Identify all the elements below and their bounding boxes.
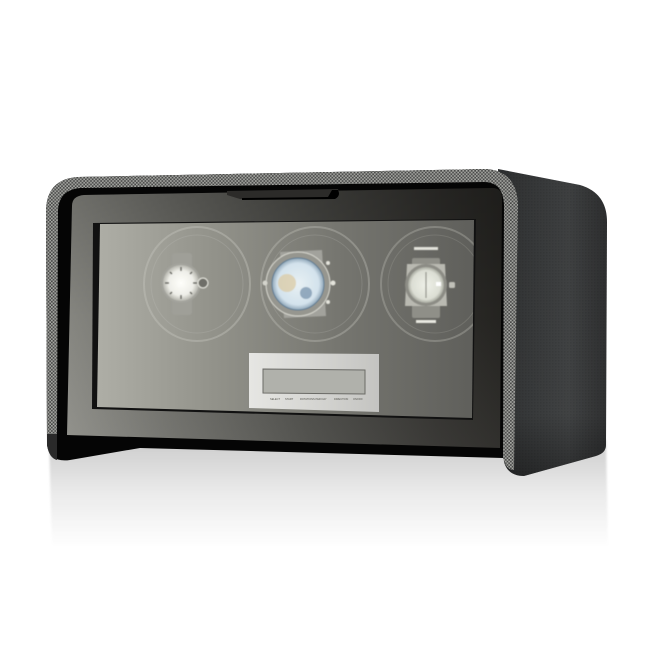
glass window xyxy=(97,220,474,418)
winder ring 2 xyxy=(261,227,369,341)
watch 1 xyxy=(161,253,208,315)
carbon fibre trim xyxy=(46,169,518,470)
winder rings clipped by the glass xyxy=(144,227,489,341)
watch 3 xyxy=(405,247,455,323)
LCD display xyxy=(263,369,365,394)
button labels: ROTATIONS PER DAY xyxy=(300,397,327,401)
box side panel xyxy=(498,169,607,476)
product illustration: three-watch winder box xyxy=(46,169,608,526)
box front shell xyxy=(46,169,518,462)
button labels: ON/OFF xyxy=(353,397,363,401)
floor reflection xyxy=(49,440,608,548)
front panel xyxy=(67,188,502,448)
top handle slot xyxy=(227,189,339,200)
button labels: START xyxy=(285,397,294,401)
watch 2 xyxy=(262,250,336,318)
winder ring 1 xyxy=(144,227,250,341)
glass window frame xyxy=(92,219,476,420)
button labels: DIRECTION xyxy=(334,397,348,401)
dark lower trim xyxy=(47,434,57,460)
button labels xyxy=(270,397,363,401)
button labels: SELECT xyxy=(270,397,281,401)
winder ring 3 xyxy=(380,226,474,342)
control plate xyxy=(249,353,379,412)
